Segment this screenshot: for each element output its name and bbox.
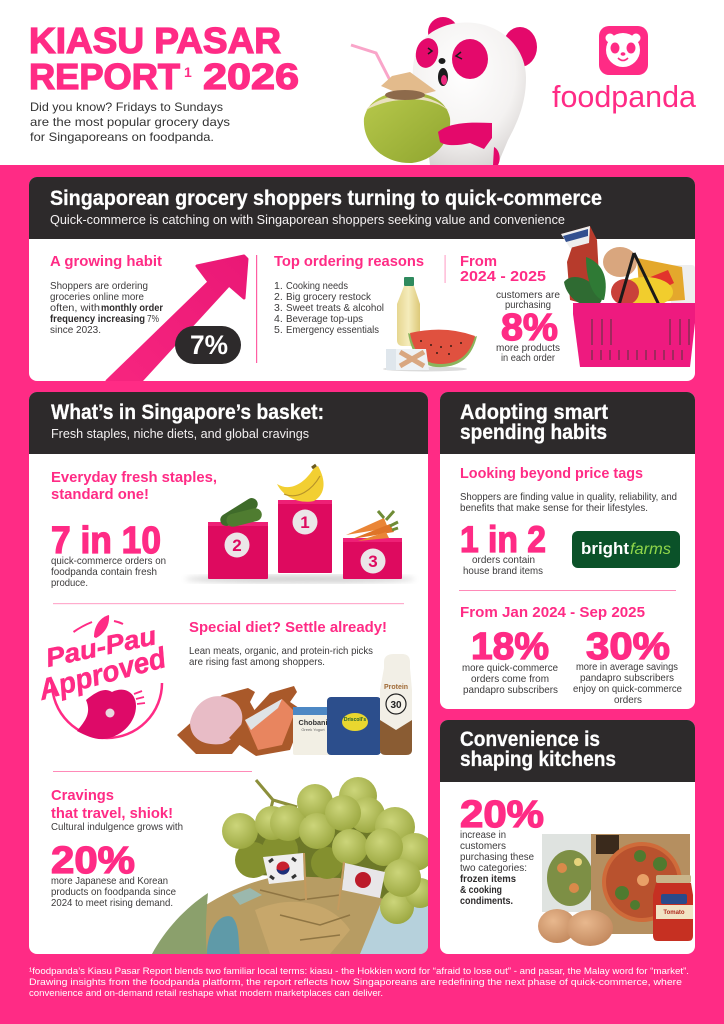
panel: quick-commerce [29, 177, 696, 381]
title: 1 [184, 64, 192, 80]
flag: Korea [263, 853, 306, 900]
stat: 18%: orders come from [471, 673, 549, 685]
intro text [30, 100, 230, 144]
panel header: shaping kitchens [460, 748, 616, 771]
stat: 20%: frozen items [460, 873, 516, 885]
panda mascot with coconut [351, 17, 537, 165]
section: special diet: Lean meats, organic, and protein-rich picks [189, 645, 373, 657]
text: a growing habit [50, 253, 163, 336]
growth arrow [107, 256, 247, 381]
text: a growing habit: often, with [50, 302, 100, 314]
text: from 2024 - 2025: 8% [501, 307, 558, 349]
icon: bananas [277, 465, 324, 502]
text: a growing habit: Shoppers are ordering [50, 280, 148, 292]
stat: 20% [460, 794, 544, 907]
top ordering reasons: Emergency essentials [286, 324, 379, 336]
logo: brightfarms [572, 531, 680, 568]
text: a growing habit: A growing habit [50, 253, 162, 270]
flag: Japan [338, 862, 385, 910]
text: from 2024 - 2025: customers are [496, 289, 560, 301]
stat: 30%: more in average savings [576, 661, 678, 673]
stat: 30%: pandapro subscribers [580, 672, 674, 684]
stat: 18%: 18% [471, 626, 549, 668]
panel header: Adopting smart [460, 401, 608, 424]
podium chart: 3 [368, 552, 378, 571]
section: special diet: Special diet? Settle already! [189, 619, 387, 636]
panel header [29, 177, 695, 239]
stat: 20%: customers [460, 840, 506, 852]
grape stem [256, 780, 297, 812]
stat: 18% [462, 626, 558, 696]
podium chart [185, 465, 415, 583]
icon: grocery basket [561, 226, 696, 367]
foodpanda logo: foodpanda [552, 79, 697, 114]
section: fresh staples: foodpanda contain fresh [51, 566, 157, 578]
stat: 1 in 2: 1 in 2 [460, 519, 546, 560]
icon: healthy foods: Protein [384, 684, 408, 691]
panel header [440, 392, 695, 454]
top ordering reasons: Sweet treats & alcohol [286, 302, 384, 314]
panel header: Convenience is [460, 728, 600, 751]
stat: 18%: more quick-commerce [462, 662, 558, 674]
section: cravings [51, 787, 183, 909]
stat: 30% [573, 626, 682, 706]
top ordering reasons: Cooking needs [286, 280, 348, 292]
stat: 30%: orders [614, 694, 642, 706]
icon: carrots [346, 511, 398, 541]
section: cravings: products on foodpanda since [51, 886, 176, 898]
stat pill: 7% [175, 326, 241, 364]
title [29, 20, 299, 97]
stat: 20%: 20% [460, 794, 544, 836]
section: cravings: Cultural indulgence grows with [51, 821, 183, 833]
footnote: convenience and on-demand retail reshape what modern marketplaces can deliver. [29, 988, 383, 998]
podium chart: 2 [232, 536, 242, 555]
title: REPORT [29, 56, 180, 97]
icon: healthy foods: Greek Yogurt [301, 727, 326, 732]
podium chart: 1 [300, 513, 310, 532]
text: from 2024 - 2025: more products [496, 342, 560, 354]
section: beyond price tags: benefits that make sense for their lifestyles. [460, 502, 648, 514]
intro text: are the most popular grocery days [30, 115, 230, 129]
icon: frozen food, pizza, jar, eggs: Tomato [663, 910, 685, 916]
stat: 7 in 10: 7 in 10 [51, 520, 161, 562]
section: beyond price tags: Shoppers are finding value in quality, reliability, and [460, 491, 677, 503]
section: cravings: more Japanese and Korean [51, 875, 168, 887]
section: beyond price tags [460, 465, 677, 514]
icon: oil bottle, watermelon, plaster [383, 277, 477, 372]
stat: 30%: enjoy on quick-commerce [573, 683, 682, 695]
text: a growing habit: since 2023. [50, 324, 101, 336]
text: a growing habit: monthly order [101, 302, 163, 314]
logo icon [599, 26, 648, 75]
panel header [440, 720, 695, 782]
section: cravings: 2024 to meet rising demand. [51, 897, 173, 909]
panel header: Fresh staples, niche diets, and global cravings [51, 426, 309, 441]
top ordering reasons: 5. [274, 324, 283, 336]
footnote [29, 966, 689, 998]
stat: 20%: & cooking [460, 884, 502, 896]
intro text: Did you know? Fridays to Sundays [30, 100, 223, 114]
stat: 20%: 20% [51, 840, 135, 882]
section: fresh staples [51, 469, 217, 589]
panel: convenience [440, 720, 695, 954]
panel header [29, 392, 428, 454]
icon: healthy foods: Driscoll's [344, 717, 366, 723]
text: from 2024 - 2025: From [460, 253, 497, 270]
title: KIASU PASAR [29, 20, 281, 61]
section: jan 2024 - sep 2025 [460, 604, 682, 706]
icon: frozen food, pizza, jar, eggs [538, 834, 693, 946]
top ordering reasons: 2. [274, 291, 283, 303]
text: from 2024 - 2025 [460, 253, 560, 364]
section: cravings: that travel, shiok! [51, 805, 173, 822]
stat: 30%: 30% [586, 626, 670, 668]
section: jan 2024 - sep 2025: From Jan 2024 - Sep 2025 [460, 604, 645, 621]
sticker: pau-pau approved [35, 615, 171, 739]
text: a growing habit: frequency increasing [50, 313, 145, 325]
icon: cucumbers [218, 496, 263, 528]
section: fresh staples: quick-commerce orders on [51, 555, 166, 567]
top ordering reasons [274, 253, 424, 336]
logo: brightfarms: bright [581, 539, 629, 558]
intro text: for Singaporeans on foodpanda. [30, 130, 214, 144]
footnote: ¹foodpanda’s Kiasu Pasar Report blends two familiar local terms: kiasu - the Hokkien word for “afraid to lose out” - and pasar, the Malay word for “market”. [29, 966, 689, 976]
stat: 18%: pandapro subscribers [463, 684, 558, 696]
sticker: pau-pau approved: Pau-Pau [43, 620, 159, 673]
panel header: spending habits [460, 421, 607, 444]
section: fresh staples: produce. [51, 577, 88, 589]
footnote: Drawing insights from the foodpanda platform, the report reflects how Singaporeans are redefining the next phase of quick-commerce, where [29, 977, 682, 987]
panel: what's in Singapore's basket [29, 392, 435, 954]
text: from 2024 - 2025: purchasing [505, 299, 551, 311]
title: 2026 [203, 56, 299, 97]
stat: 20%: purchasing these [460, 851, 534, 863]
stat: 1 in 2: house brand items [463, 565, 543, 577]
panel header: Quick-commerce is catching on with Singaporean shoppers seeking value and convenience [50, 212, 565, 227]
section: cravings: Cravings [51, 787, 114, 804]
icon: hand [77, 690, 145, 739]
top ordering reasons: 3. [274, 302, 283, 314]
top ordering reasons: Top ordering reasons [274, 253, 424, 270]
top ordering reasons: 4. [274, 313, 283, 325]
icon: healthy foods [177, 654, 412, 756]
icon: leaf [94, 615, 109, 638]
text: from 2024 - 2025: 2024 - 2025 [460, 268, 546, 285]
section: beyond price tags: Looking beyond price tags [460, 465, 643, 482]
top ordering reasons: 1. [274, 280, 283, 292]
text: a growing habit: groceries online more [50, 291, 144, 303]
sticker: pau-pau approved: Approved [35, 642, 171, 707]
panel header: Singaporean grocery shoppers turning to quick-commerce [50, 187, 602, 210]
section: special diet: are rising fast among shoppers. [189, 656, 325, 668]
top ordering reasons: Big grocery restock [286, 291, 372, 303]
stat: 1 in 2: orders contain [472, 554, 535, 566]
icon: healthy foods: 30 [390, 700, 402, 711]
foodpanda logo [552, 26, 697, 114]
top ordering reasons: Beverage top-ups [286, 313, 363, 325]
icon: globe with grapes and flags [152, 777, 435, 954]
panel header: What’s in Singapore’s basket: [51, 401, 324, 424]
section: fresh staples: Everyday fresh staples, [51, 469, 217, 486]
section: special diet [189, 619, 387, 668]
stat: 1 in 2 [460, 519, 546, 577]
logo: brightfarms: farms [630, 541, 671, 558]
grapes [222, 777, 435, 924]
stat: 20%: condiments. [460, 895, 513, 907]
icon: healthy foods: Chobani [298, 720, 328, 727]
text: from 2024 - 2025: in each order [501, 352, 555, 364]
text: a growing habit: 7% [147, 313, 159, 325]
stat: 20%: two categories: [460, 862, 527, 874]
section: fresh staples: standard one! [51, 486, 149, 503]
panel: smart spending habits [440, 392, 695, 709]
stat pill: 7%: 7% [190, 330, 228, 360]
stat: 20%: increase in [460, 829, 506, 841]
